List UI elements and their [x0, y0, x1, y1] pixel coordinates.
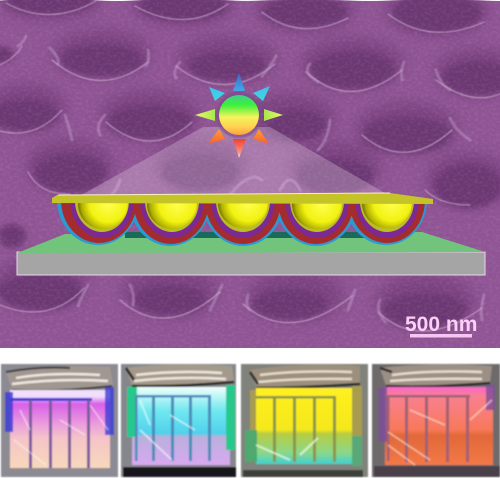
light cone from sun to device — [78, 127, 392, 197]
panel: SEM image of nanowell surface — [0, 0, 500, 348]
SEM pit rim highlights — [0, 1, 500, 331]
SEM pits outer shade — [0, 0, 500, 330]
purple layer — [70, 203, 419, 238]
icon: rainbow sun — [195, 73, 283, 158]
red layer — [61, 203, 425, 244]
photo: violet device — [1, 364, 118, 477]
colored film — [132, 387, 230, 465]
photo: red device — [372, 364, 500, 477]
purple side strips — [378, 385, 495, 442]
grid fingers — [135, 395, 211, 461]
scale bar label: 500 nm — [405, 313, 477, 336]
substrate: gray layer — [17, 252, 485, 275]
silver contact band — [126, 364, 234, 386]
photo: yellow device — [241, 364, 368, 477]
side green fade — [245, 430, 257, 462]
dark fill under cups — [125, 232, 385, 238]
lower right green strip — [352, 436, 362, 466]
conductive green layer — [17, 232, 485, 253]
colored film — [385, 387, 493, 465]
grid fingers — [256, 396, 336, 462]
film cracks — [388, 400, 492, 465]
blue side strips — [5, 387, 114, 435]
film cracks — [256, 438, 318, 460]
blue outer layer — [57, 203, 427, 246]
nanodome cups — [57, 203, 427, 246]
olive side strips — [250, 386, 362, 436]
SEM surface texture — [0, 0, 500, 348]
dark base strip — [123, 467, 236, 477]
scale bar — [410, 334, 472, 338]
top yellow electrode plate — [52, 193, 433, 204]
green side strips — [127, 385, 235, 450]
sun halo — [216, 92, 262, 138]
colored film — [10, 390, 110, 468]
grid fingers — [386, 395, 470, 462]
film cracks — [14, 405, 108, 465]
dark base strip — [374, 466, 500, 477]
plate highlight — [58, 193, 390, 195]
silver contact band — [250, 365, 360, 388]
silver contact band — [380, 364, 492, 387]
photo: cyan device — [121, 364, 236, 477]
dark base strip — [243, 470, 363, 477]
sun disc — [219, 95, 259, 135]
grid fingers — [29, 400, 90, 468]
film cracks — [140, 400, 195, 460]
device cross-section diagram — [16, 192, 486, 276]
colored film — [256, 388, 353, 464]
SEM ridge streaks — [18, 36, 484, 322]
olive layer — [75, 203, 414, 232]
silver contact band — [6, 366, 113, 390]
yellow spheres — [78, 203, 412, 229]
SEM pits — [0, 0, 500, 327]
sun rays — [195, 73, 283, 158]
